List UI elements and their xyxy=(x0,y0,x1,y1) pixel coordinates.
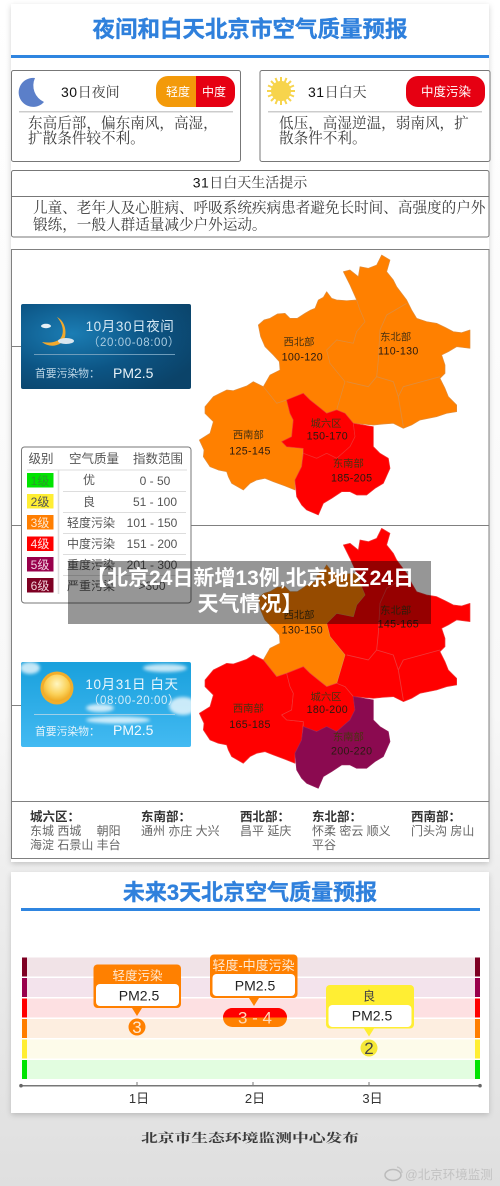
callout: day 1: 轻度污染 xyxy=(112,968,163,983)
badge: moderate pollution: 中度污染 xyxy=(421,84,471,99)
map: night of the 30th: 110-130 xyxy=(378,345,419,357)
panel: daily life advice: 31日白天生活提示 xyxy=(193,174,308,190)
legend: district groups: 平谷 xyxy=(312,838,336,852)
map: night of the 30th: 125-145 xyxy=(229,446,271,458)
map: daytime of the 31st: 城六区 xyxy=(311,691,341,703)
map: daytime of the 31st: 180-200 xyxy=(307,704,348,716)
legend: district groups: 城六区： xyxy=(30,809,80,824)
table: air quality levels: 重度污染 xyxy=(67,557,115,572)
callout: day 3 xyxy=(326,985,414,1058)
badge: moderate pollution xyxy=(406,76,485,107)
panel: maps frame xyxy=(12,250,489,858)
axis: days xyxy=(19,1082,482,1106)
map: night of the 30th: 西南部 xyxy=(233,429,264,442)
table: air quality levels: 轻度污染 xyxy=(67,515,115,530)
callout: day 2 xyxy=(210,954,298,1028)
map: night of the 30th: 西北部 xyxy=(284,335,314,348)
legend: district groups: 海淀 石景山 丰台 xyxy=(30,837,121,852)
table: air quality levels: 1级 xyxy=(31,474,49,488)
map: night of the 30th: 185-205 xyxy=(331,472,372,484)
map: night of the 30th xyxy=(199,255,470,515)
icon: crescent moon with clouds xyxy=(41,317,74,346)
overlay: headline banner xyxy=(68,561,431,624)
card: 30 October night: 10月30日夜间 xyxy=(86,319,174,334)
table: air quality levels: 3级 xyxy=(31,516,49,530)
legend: district groups: 东北部： xyxy=(312,809,362,824)
map: daytime of the 31st: 西北部 xyxy=(284,609,314,622)
table: air quality levels: 指数范围 xyxy=(133,451,183,466)
footer: publisher: 北京市生态环境监测中心发布 xyxy=(141,1130,360,1145)
callout: day 3: 良 xyxy=(363,988,375,1004)
legend: district groups: 东城 西城 朝阳 xyxy=(30,824,121,838)
table: air quality levels: >300 xyxy=(138,579,166,593)
table: air quality levels: 级别 xyxy=(28,452,54,466)
label: 31st daytime: 31日白天 xyxy=(308,84,367,100)
badge: light to moderate xyxy=(156,76,235,107)
map: night of the 30th: 东北部 xyxy=(380,331,411,344)
table: air quality levels: 2级 xyxy=(31,495,49,509)
chart: air quality bands xyxy=(22,958,480,1079)
map: daytime of the 31st xyxy=(199,528,470,788)
map: night of the 30th: 东南部 xyxy=(333,457,364,470)
table: air quality levels: 空气质量 xyxy=(69,451,119,466)
callout: day 1: PM2.5 xyxy=(119,988,159,1004)
card: 30 October night: （20:00-08:00） xyxy=(88,336,180,349)
callout: day 2: 3 - 4 xyxy=(238,1008,272,1028)
legend: district groups: 东南部： xyxy=(141,809,191,824)
table: air quality levels: 101 - 150 xyxy=(127,516,178,530)
table: air quality levels: 中度污染 xyxy=(67,536,115,551)
card: 31 October daytime xyxy=(20,662,197,747)
map: daytime of the 31st: 西南部 xyxy=(233,702,264,715)
table: air quality levels: 6级 xyxy=(31,579,49,593)
table: air quality levels: 151 - 200 xyxy=(127,537,178,551)
card: 31 October daytime: 10月31日 白天 xyxy=(85,677,179,692)
axis: days: 3日 xyxy=(362,1091,383,1106)
card: night of the 30th xyxy=(12,70,240,162)
text: day conditions: 低压，高湿逆温，弱南风，扩 xyxy=(279,116,469,132)
map: daytime of the 31st: 130-150 xyxy=(282,625,323,637)
icon: sun xyxy=(40,672,74,704)
map: night of the 30th: 城六区 xyxy=(311,418,341,430)
panel: next 3 days forecast xyxy=(11,872,489,1113)
table: air quality levels: 4级 xyxy=(31,537,49,551)
callout: day 3: 2 xyxy=(364,1039,374,1058)
callout: day 2: PM2.5 xyxy=(235,978,275,994)
legend: district groups xyxy=(30,809,474,852)
map: night of the 30th: 150-170 xyxy=(307,431,348,443)
table: air quality levels: 201 - 300 xyxy=(127,558,178,572)
text: night conditions: 东高后部，偏东南风，高湿， xyxy=(28,116,218,132)
table: air quality levels: 优 xyxy=(83,473,95,487)
map: daytime of the 31st: 东北部 xyxy=(380,604,411,617)
text: night conditions: 扩散条件较不利。 xyxy=(28,129,145,147)
map: daytime of the 31st: 145-165 xyxy=(378,619,419,631)
map: night of the 30th: 100-120 xyxy=(282,351,323,363)
table: air quality levels: 良 xyxy=(83,494,95,509)
badge: light to moderate: 中度 xyxy=(202,84,226,99)
map: daytime of the 31st: 200-220 xyxy=(331,746,372,758)
card: 31 October daytime: PM2.5 xyxy=(113,722,154,738)
legend: district groups: 怀柔 密云 顺义 xyxy=(312,824,391,838)
panel: tonight and tomorrow forecast xyxy=(11,4,490,862)
icon: sun xyxy=(267,77,295,105)
table: air quality levels: 51 - 100 xyxy=(133,495,177,509)
card: 30 October night: 首要污染物： xyxy=(35,366,100,380)
callout: day 3: PM2.5 xyxy=(352,1008,392,1024)
callout: day 2: 轻度-中度污染 xyxy=(212,958,295,973)
overlay: headline banner: 天气情况】 xyxy=(198,593,302,616)
card: 30 October night: PM2.5 xyxy=(113,365,154,381)
legend: district groups: 昌平 延庆 xyxy=(240,824,291,838)
overlay: headline banner: 【北京24日新增13例,北京地区24日 xyxy=(86,566,414,590)
text: advice: 儿童、老年人及心脏病、呼吸系统疾病患者避免长时间、高强度的户外 xyxy=(33,200,485,216)
heading: next 3 days: 未来3天北京空气质量预报 xyxy=(123,880,377,905)
map: daytime of the 31st: 165-185 xyxy=(229,719,271,731)
text: advice: 锻练，一般人群适量减少户外运动。 xyxy=(33,216,267,234)
callout: day 1: 3 xyxy=(132,1018,142,1037)
legend: district groups: 西北部： xyxy=(240,809,290,824)
text: day conditions: 散条件不利。 xyxy=(279,129,367,147)
panel: daily life advice xyxy=(12,170,489,237)
map: daytime of the 31st: 东南部 xyxy=(333,730,364,743)
callout: day 1 xyxy=(94,964,181,1037)
card: 30 October night xyxy=(21,304,191,389)
card: 31 October daytime: 首要污染物： xyxy=(35,724,100,738)
heading: night and day forecast: 夜间和白天北京市空气质量预报 xyxy=(92,16,408,42)
axis: days: 1日 xyxy=(129,1091,149,1106)
card: 31 October daytime: （08:00-20:00） xyxy=(88,694,180,707)
watermark: Weibo handle: @北京环境监测 xyxy=(405,1167,493,1182)
table: air quality levels: 5级 xyxy=(31,558,49,572)
table: air quality levels xyxy=(22,447,191,603)
legend: district groups: 门头沟 房山 xyxy=(411,823,474,838)
label: 30th night: 30日夜间 xyxy=(61,84,120,100)
icon: moon xyxy=(19,78,44,107)
badge: light to moderate: 轻度 xyxy=(166,84,190,99)
table: air quality levels: 0 - 50 xyxy=(140,474,171,488)
card: daytime of the 31st xyxy=(260,70,490,162)
axis: days: 2日 xyxy=(245,1091,265,1106)
legend: district groups: 西南部： xyxy=(411,809,461,824)
table: air quality levels: 严重污染 xyxy=(67,578,115,593)
legend: district groups: 通州 亦庄 大兴 xyxy=(141,823,220,838)
